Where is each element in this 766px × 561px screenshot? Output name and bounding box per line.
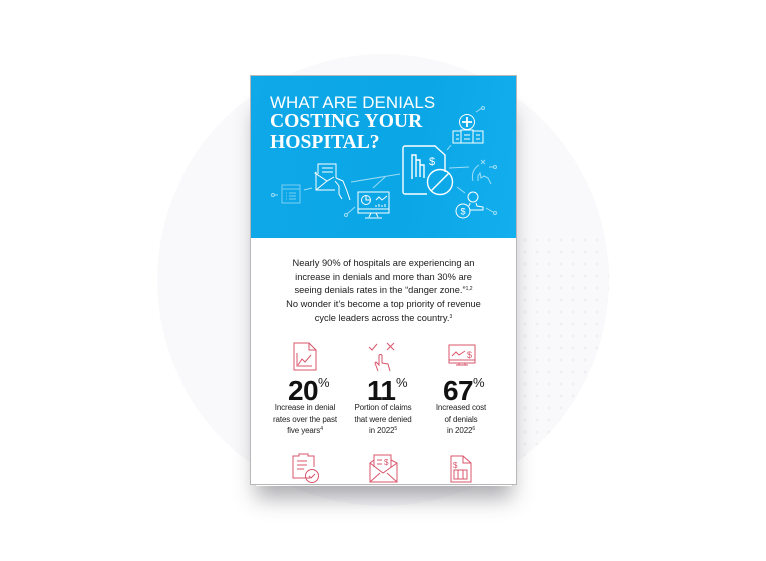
icon: envelope with dollar: $ [384, 458, 389, 467]
icon: denied document [403, 146, 452, 194]
icon: monitor trend: $ [467, 350, 472, 360]
connector lines [272, 106, 496, 216]
card shadow [256, 100, 512, 486]
heading: costing your hospital: HOSPITAL? [270, 132, 380, 153]
stat caption: in 20226 [447, 426, 475, 435]
icon: list window [282, 185, 300, 203]
intro paragraph: No wonder it’s become a top priority of revenue [286, 299, 481, 309]
icon: monitor trend [449, 345, 475, 365]
stat icons [292, 342, 476, 483]
stat caption: Portion of claims [354, 403, 412, 412]
icon: hospital [453, 114, 483, 143]
icon: monitor with charts [358, 192, 389, 218]
stat caption: of denials [444, 415, 478, 424]
dot pattern [519, 234, 609, 506]
icon: checks and pointing hand [369, 343, 394, 371]
icon: document with table: $ [453, 461, 458, 470]
heading line: what are denials: WHAT ARE DENIALS [270, 93, 435, 112]
heading: costing your hospital: COSTING YOUR [270, 111, 422, 132]
stat caption: that were denied [354, 415, 412, 424]
header icons illustration [271, 106, 497, 218]
stat caption: in 20225 [369, 426, 397, 435]
stat caption: rates over the past [273, 415, 337, 424]
stat caption [436, 403, 486, 435]
stat: 20 percent: % [318, 375, 330, 390]
intro paragraph: increase in denials and more than 30% are [295, 272, 472, 282]
infographic card [250, 75, 517, 485]
intro paragraph: cycle leaders across the country.3 [315, 313, 452, 323]
icon: denied document: $ [429, 156, 435, 168]
stat: 67 percent [436, 375, 486, 435]
stat caption [273, 403, 338, 435]
blue header panel [251, 76, 516, 238]
icon: envelope and hand [315, 164, 350, 200]
intro paragraph [286, 258, 481, 323]
stat: 67 percent: % [473, 375, 485, 390]
stat number: 67 [443, 375, 473, 406]
icon: person with dollar coin [456, 192, 483, 218]
intro paragraph: Nearly 90% of hospitals are experiencing an [293, 258, 474, 268]
stat caption: Increase in denial [275, 403, 335, 412]
stat: 20 percent [273, 375, 338, 435]
icon: pointing hand with marks [472, 160, 491, 184]
stat: 11 percent: % [396, 375, 408, 390]
icon: clipboard check [293, 454, 318, 482]
stat: 11 percent [354, 375, 412, 435]
stat number: 20 [288, 375, 318, 406]
intro paragraph: seeing denials rates in the “danger zone.”1,2 [294, 285, 473, 295]
icon: envelope with dollar [370, 455, 397, 482]
icon: person with dollar coin: $ [460, 206, 466, 216]
background circle [157, 54, 609, 506]
stat caption [354, 403, 412, 435]
icon: document with table [451, 456, 471, 482]
heading: costing your hospital [270, 111, 422, 153]
stat caption: five years4 [287, 426, 323, 435]
stat caption: Increased cost [436, 403, 486, 412]
icon: chart document [294, 343, 316, 370]
stat number: 11 [367, 375, 395, 406]
